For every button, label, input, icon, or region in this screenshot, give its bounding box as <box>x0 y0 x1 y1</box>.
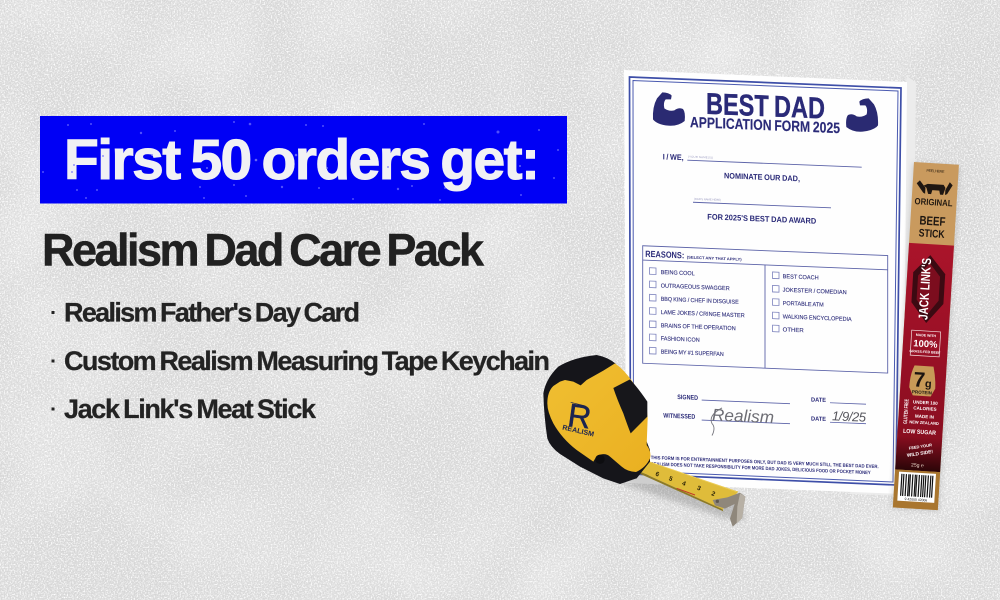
signature block: WITNESSED <box>663 413 696 421</box>
tape blade and hook: 3 <box>696 485 702 493</box>
icon: cow and cleavers <box>916 180 953 195</box>
reasons right column: PORTABLE ATM <box>783 301 824 309</box>
reasons left column: LAME JOKES / CRINGE MASTER <box>661 310 745 319</box>
disclaimer: THIS FORM IS FOR ENTERTAINMENT PURPOSES ONLY, BUT DAD IS VERY MUCH STILL THE BEST DAD EVER. <box>651 455 879 470</box>
product claims: NEW ZEALAND <box>909 419 939 426</box>
reasons left column: OUTRAGEOUS SWAGGER <box>661 283 730 292</box>
tape shadow <box>590 470 745 520</box>
grass fed callout: 100% <box>913 338 938 351</box>
wild side tag: FEED YOUR <box>908 442 932 451</box>
reasons table: REASONS: <box>645 249 684 260</box>
product claims: LOW SUGAR <box>903 429 937 437</box>
form content, skewed with the sheet <box>643 85 888 477</box>
list item: meat stick: Jack Link's Meat Stick <box>64 394 317 424</box>
realism logo: R <box>566 397 594 435</box>
original label: ORIGINAL <box>914 196 953 208</box>
weight: 25g ℮ <box>911 462 924 469</box>
icon: left flexed bicep <box>653 92 685 126</box>
wild side tag <box>906 441 935 460</box>
reasons right column: JOKESTER / COMEDIAN <box>783 288 847 296</box>
disclaimer: REALISM DOES NOT TAKE RESPONSIBILITY FOR MORE DAD JOKES, DELICIOUS FOOD OR POCKET MONEY <box>651 461 871 476</box>
reasons left column: BBQ KING / CHEF IN DISGUISE <box>661 297 739 306</box>
signature block: DATE <box>811 416 826 423</box>
list: pack contents <box>52 298 550 424</box>
banner: first 50 orders <box>40 116 567 204</box>
dad name line <box>693 197 831 208</box>
icon: right flexed bicep <box>846 98 878 132</box>
jack links logo: JACK LINK'S <box>915 257 934 320</box>
reasons left column: BRAINS OF THE OPERATION <box>661 323 736 332</box>
tape blade and hook: 4 <box>681 480 687 488</box>
handwritten date: 1/9/25 <box>832 408 867 425</box>
nominator line: I / WE, <box>663 152 684 162</box>
product claims: MADE IN <box>915 414 934 420</box>
reasons right column <box>772 272 852 336</box>
reasons table: (SELECT ANY THAT APPLY) <box>687 256 743 262</box>
protein badge <box>909 365 937 397</box>
beef stick label: BEEF <box>919 213 946 229</box>
peel here tab: PEEL HERE <box>926 169 945 174</box>
dad name line: (DAD'S NAME HERE) <box>694 197 721 202</box>
jack links logo <box>910 254 946 324</box>
tape housing <box>543 355 650 484</box>
reasons right column: WALKING ENCYCLOPEDIA <box>783 314 852 323</box>
nominator line: (YOUR NAME(S)) <box>688 155 713 160</box>
product claims: UNDER 100 <box>913 399 938 406</box>
form title: BEST DAD <box>706 88 825 126</box>
meat stick package <box>892 162 960 511</box>
product claims <box>902 399 940 437</box>
signature block: SIGNED <box>677 394 698 402</box>
form title <box>690 87 840 137</box>
banner: first 50 orders: First 50 orders get: <box>64 128 540 192</box>
grass fed callout <box>909 330 942 357</box>
reasons left column: BEING COOL <box>661 270 695 277</box>
barcode <box>897 472 936 503</box>
measuring tape keychain <box>543 355 745 527</box>
nominate text: NOMINATE OUR DAD, <box>724 171 800 183</box>
list item: card: Realism Father's Day Card <box>64 298 360 328</box>
reasons left column: FASHION ICON <box>661 336 700 344</box>
wild side tag: WILD SIDE! <box>906 449 934 459</box>
grass fed callout: MADE WITH <box>916 333 937 338</box>
reasons table <box>643 246 888 373</box>
handwritten signature: Realism <box>712 406 774 427</box>
grass fed callout: GRASS-FED BEEF <box>909 349 941 355</box>
signature block: DATE <box>811 397 826 404</box>
reasons left column <box>650 268 745 359</box>
reasons right column: BEST COACH <box>783 274 819 282</box>
tape blade and hook: 6 <box>654 471 661 479</box>
reasons left column: BEING MY #1 SUPERFAN <box>661 349 724 358</box>
beef stick label: STICK <box>918 227 945 241</box>
protein badge: PROTEIN <box>912 389 932 396</box>
signature block <box>663 392 867 442</box>
protein badge: 7g <box>913 368 933 392</box>
heading: care pack: Realism Dad Care Pack <box>42 224 485 276</box>
banner speckles <box>42 121 559 201</box>
product claims: CALORIES <box>913 405 937 412</box>
tape blade and hook <box>636 461 745 527</box>
list item: keychain: Custom Realism Measuring Tape Keychain <box>64 346 550 376</box>
nominator line <box>663 152 862 169</box>
tape blade and hook: 5 <box>668 475 674 483</box>
signature flourish <box>711 407 722 436</box>
award text: FOR 2025'S BEST DAD AWARD <box>707 212 816 226</box>
product claims: GLUTEN FREE <box>903 399 911 424</box>
speckles over banner text <box>71 154 521 173</box>
beef stick label <box>918 213 946 241</box>
disclaimer <box>651 455 879 476</box>
tape blade and hook: 2 <box>710 490 717 498</box>
form title: APPLICATION FORM 2025 <box>690 114 840 137</box>
barcode: 9 42000 42006 <box>904 497 927 502</box>
reasons right column: OTHER <box>783 327 804 334</box>
application form paper <box>624 70 916 496</box>
realism logo: REALISM <box>562 424 595 439</box>
